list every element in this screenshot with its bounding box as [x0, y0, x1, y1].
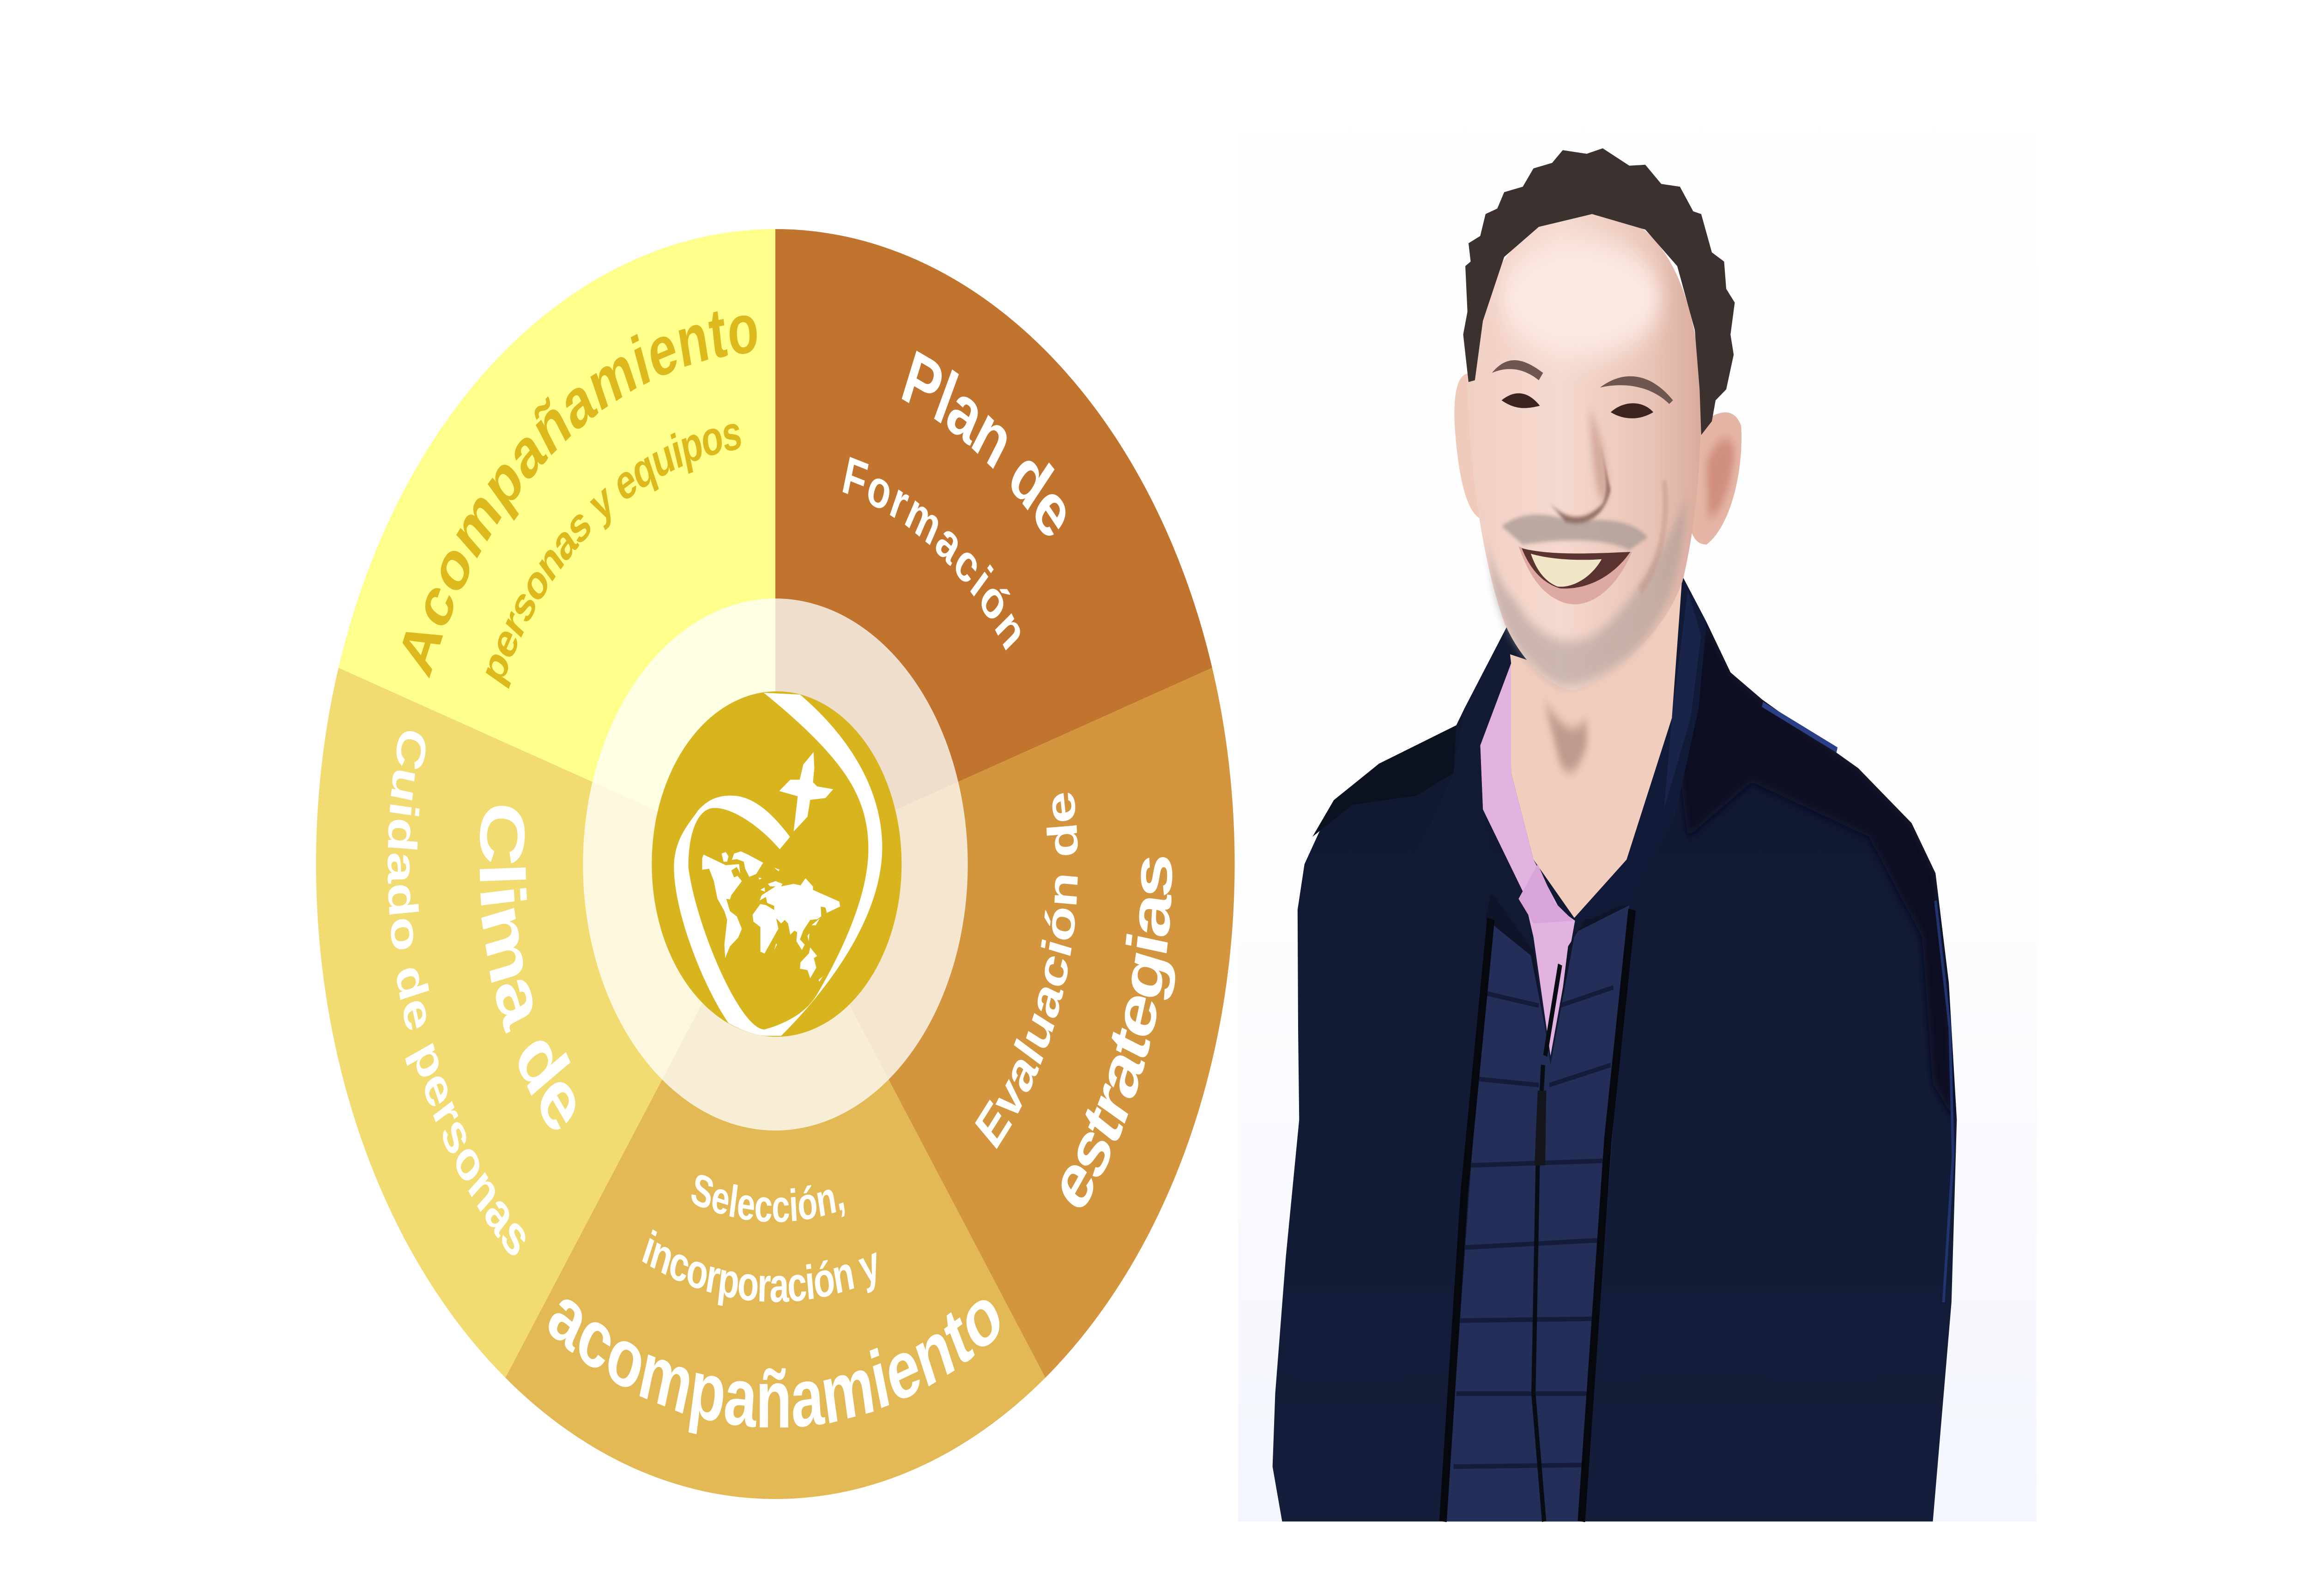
left eye: [1501, 393, 1540, 408]
sector: Clima de Cuidado de personas: [301, 668, 775, 1378]
vest quilting: [1454, 987, 1614, 1467]
sector: Evaluación de estrategias: estrategias: [972, 810, 1261, 1230]
sector: Clima de Cuidado de personas: Clima de: [431, 791, 630, 1161]
jacket shoulder yoke: [1677, 622, 1954, 1120]
wheel diagram: [301, 165, 1261, 1596]
translucent centre ring: [583, 598, 968, 1130]
sector: Acompañamiento personas y equipos: personas y equipos: [472, 311, 758, 775]
zip pull: [1535, 1090, 1546, 1166]
pink shirt: [1480, 663, 1575, 1056]
left shoulder yoke: [1312, 725, 1456, 837]
sector: Selección, incorporación y acompañamiento: incorporación y: [636, 1115, 897, 1405]
logo: heart ribbon, cross and world map: [652, 691, 901, 1037]
sector: Evaluación de estrategias: Evaluación de: [887, 760, 1175, 1162]
right ear: [1688, 412, 1741, 544]
right ear shade: [1706, 439, 1735, 517]
sector: Selección, incorporación y acompañamiento: Selección,: [685, 1107, 858, 1282]
sector: Acompañamiento personas y equipos: [338, 165, 779, 864]
sleeve stripe: [1935, 901, 1953, 1302]
moustache: [1501, 514, 1648, 550]
shoulder stripe: [1762, 704, 1837, 750]
left brow: [1492, 360, 1543, 380]
hair: [1463, 148, 1735, 435]
jacket right zipper: [1581, 910, 1632, 1522]
nose side shade: [1590, 408, 1608, 503]
sector: Acompañamiento personas y equipos: Acompañamiento: [386, 165, 779, 794]
face: [1467, 212, 1701, 691]
lips: [1518, 546, 1632, 605]
sector: Evaluación de estrategias: [775, 668, 1261, 1378]
vest centre zip: [1534, 965, 1560, 1522]
sector: Selección, incorporación y acompañamiento: acompañamiento: [535, 1004, 1028, 1596]
smile fold: [1640, 481, 1666, 590]
sector: Plan de Formación: [775, 229, 1212, 864]
collar inner band: [1664, 590, 1701, 810]
neck shadow: [1544, 700, 1587, 772]
photo: smiling man in navy jacket: [1238, 0, 2037, 1522]
sector: Plan de Formación: Formación: [821, 445, 1055, 669]
right collar: [1573, 576, 1706, 919]
stubble: [1480, 499, 1687, 686]
vest right collar band: [1560, 905, 1629, 1010]
sector: Plan de Formación: Plan de: [878, 332, 1105, 568]
jacket body: [1273, 576, 1957, 1522]
forehead highlight: [1501, 239, 1661, 357]
left ear: [1454, 373, 1481, 519]
sector: Clima de Cuidado de personas: Cuidado de personas: [301, 720, 622, 1277]
mouth: [1522, 548, 1631, 588]
teeth: [1531, 554, 1602, 587]
nose shadow: [1544, 444, 1611, 523]
right eye: [1611, 403, 1653, 418]
jacket left zipper: [1443, 919, 1491, 1522]
left collar: [1412, 627, 1511, 899]
shirt collar fold: [1518, 864, 1573, 924]
quilted vest: [1445, 891, 1629, 1522]
sector: Selección, incorporación y acompañamiento: [505, 864, 1046, 1596]
right brow: [1600, 376, 1673, 404]
neck: [1510, 572, 1683, 919]
vest left collar band: [1486, 891, 1545, 1028]
